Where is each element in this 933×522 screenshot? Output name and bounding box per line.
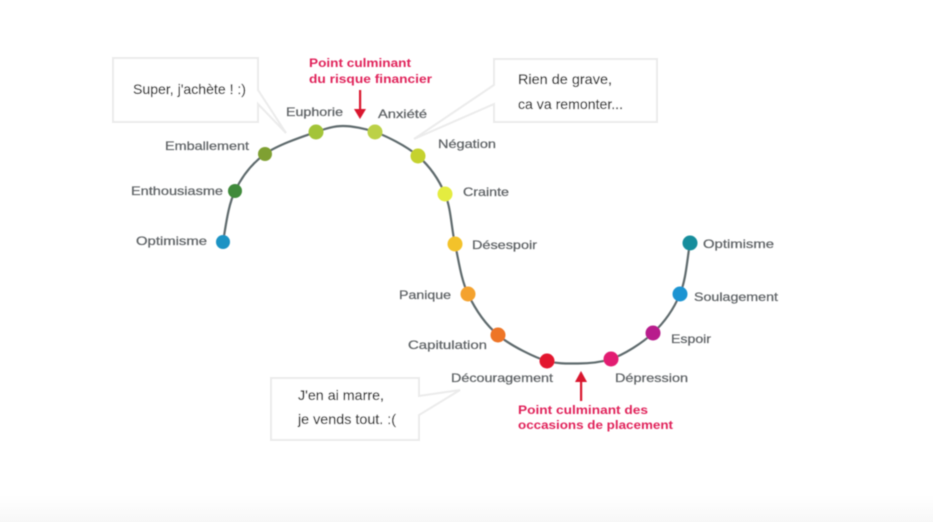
speech bubble: Rien de grave: ca va remonter... (518, 96, 623, 112)
point: Négation: Négation (438, 137, 496, 151)
point: Enthousiasme (131, 184, 242, 198)
callout: risk peak: Point culminant (309, 58, 411, 70)
callout: risk peak (309, 58, 433, 119)
point: Anxiété (368, 107, 427, 140)
speech bubble: Rien de grave: Rien de grave, (518, 71, 612, 87)
callout: opportunity peak: Point culminant des (518, 405, 648, 417)
point: Panique: Panique (399, 288, 451, 302)
point: Optimisme end (682, 236, 774, 251)
speech bubble: J'en ai marre: J'en ai marre, (298, 387, 384, 403)
point: Panique (399, 286, 476, 302)
point: Optimisme start (136, 234, 230, 249)
speech bubble: Super, j'achète (113, 58, 286, 133)
callout: opportunity peak (518, 371, 673, 432)
point: Négation (410, 137, 496, 164)
point: Dépression (604, 352, 688, 385)
point: Euphorie (286, 105, 343, 140)
point: Espoir (646, 326, 711, 346)
point: Désespoir: Désespoir (472, 238, 537, 252)
point: Découragement (451, 354, 554, 385)
speech bubble: J'en ai marre (271, 378, 460, 440)
point: Capitulation (408, 328, 506, 352)
point: Emballement (165, 139, 272, 161)
cycle points and labels (131, 105, 779, 385)
speech bubble: Rien de grave (414, 59, 657, 139)
cycle curve (223, 126, 690, 364)
callout: opportunity peak: occasions de placement (518, 420, 673, 432)
point: Espoir: Espoir (671, 332, 711, 346)
point: Emballement: Emballement (165, 139, 250, 153)
speech bubble: Super, j'achète: Super, j'achète ! :) (133, 81, 246, 97)
point: Dépression: Dépression (615, 371, 688, 385)
point: Découragement: Découragement (451, 371, 554, 385)
point: Soulagement (672, 286, 779, 304)
point: Désespoir (448, 236, 537, 252)
point: Anxiété: Anxiété (378, 107, 427, 121)
point: Enthousiasme: Enthousiasme (131, 184, 223, 198)
callout: risk peak: du risque financier (309, 74, 433, 86)
point: Optimisme end: Optimisme (703, 237, 774, 251)
point: Soulagement: Soulagement (694, 290, 779, 304)
point: Optimisme start: Optimisme (136, 234, 207, 248)
point: Capitulation: Capitulation (408, 338, 487, 352)
point: Crainte (438, 185, 509, 202)
point: Euphorie: Euphorie (286, 105, 343, 119)
speech bubble: J'en ai marre: je vends tout. :( (297, 411, 396, 427)
point: Crainte: Crainte (463, 185, 509, 199)
